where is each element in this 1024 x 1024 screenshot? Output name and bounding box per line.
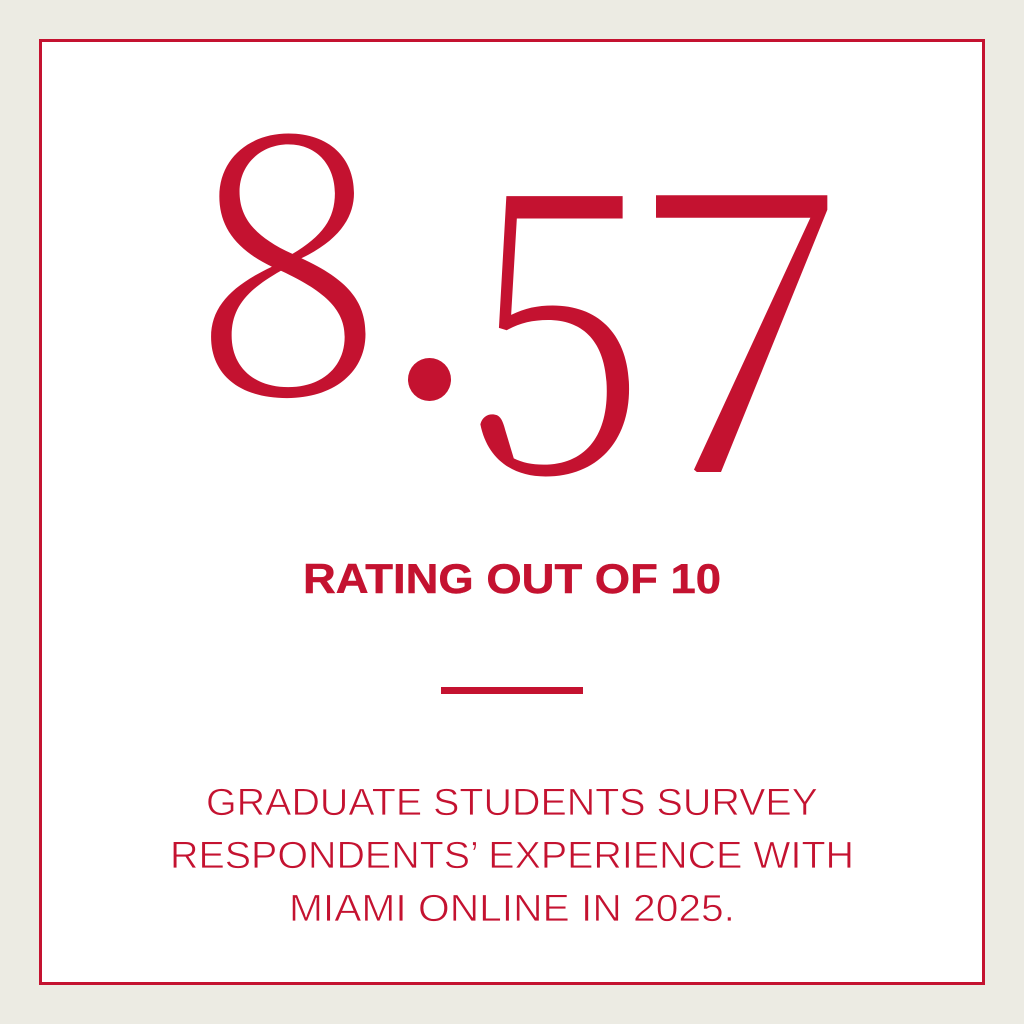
decimal point [408,358,451,401]
description line 3: MIAMI ONLINE IN 2025. [289,888,735,930]
digit 5: 5 [466,18,647,584]
digit 7: 7 [635,18,851,586]
heading: rating out of 10: RATING OUT OF 10 [303,555,721,602]
description line 1: GRADUATE STUDENTS SURVEY [206,782,818,824]
description line 2: RESPONDENTS’ EXPERIENCE WITH [170,835,854,877]
big rating number 8.57 [192,0,851,586]
divider bar [441,687,583,694]
description text [170,782,854,930]
